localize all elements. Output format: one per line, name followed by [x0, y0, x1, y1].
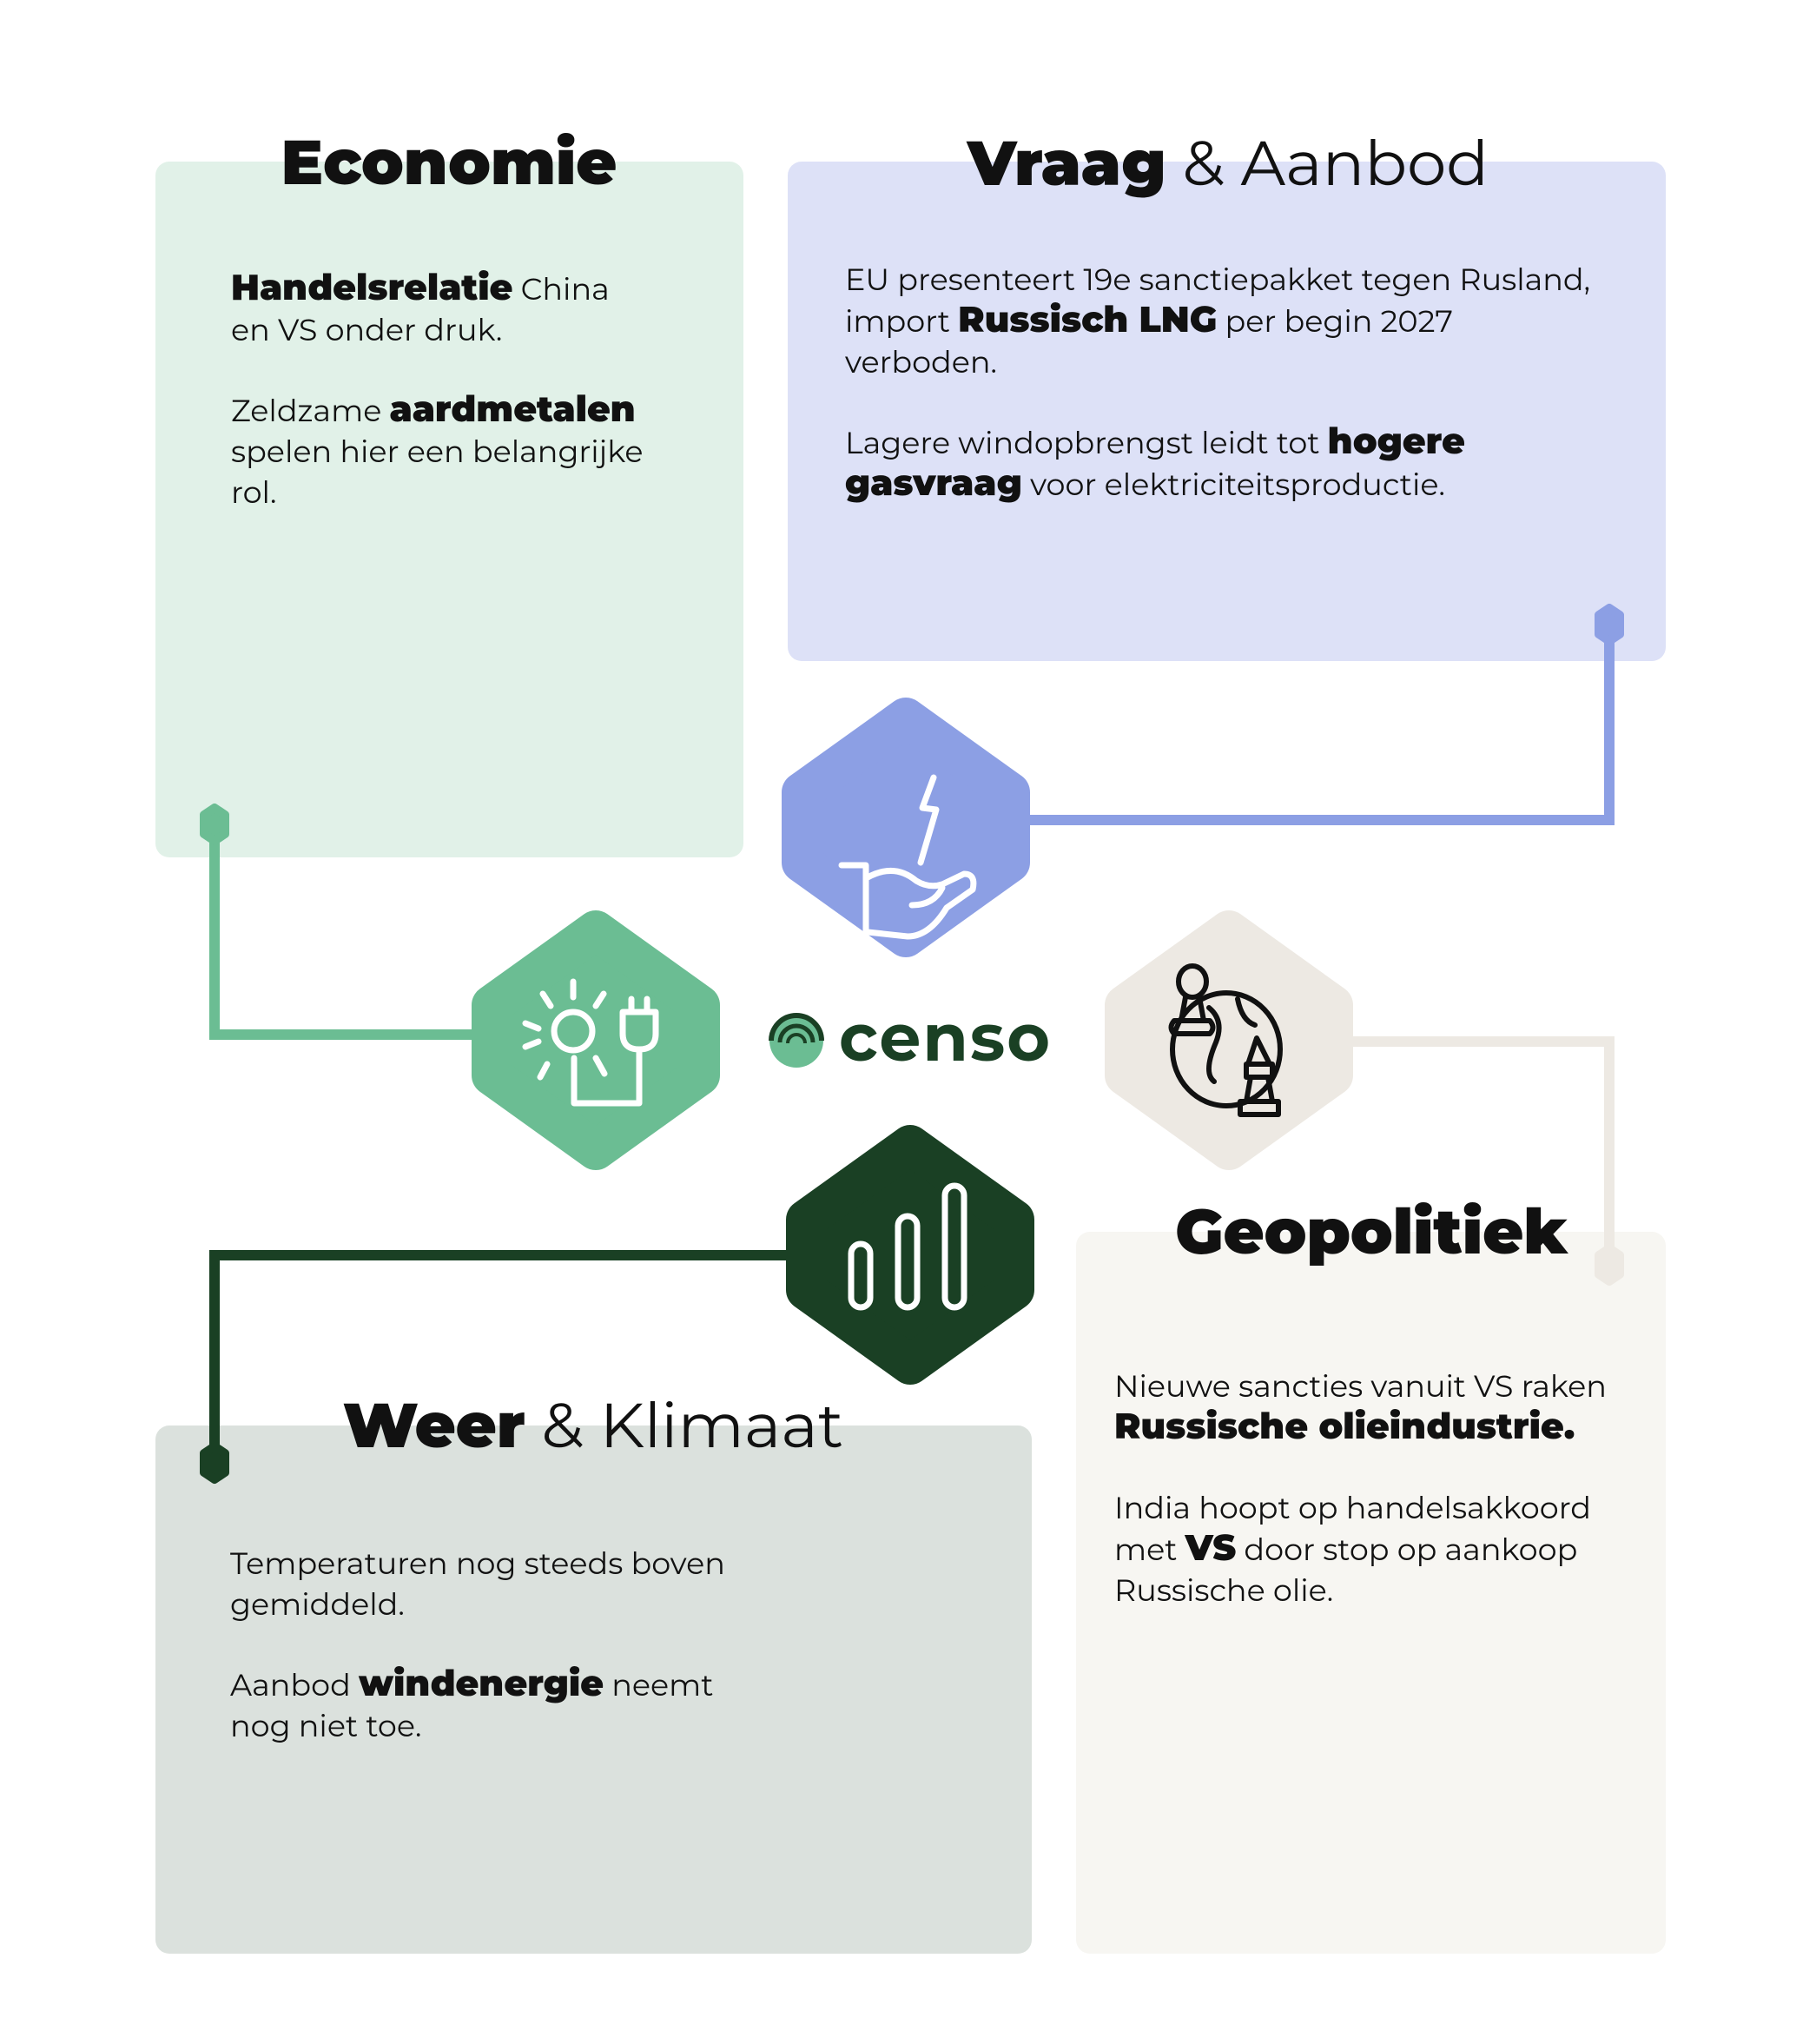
text: vraag: Lagere windopbrengst leidt tot hogere [845, 420, 1465, 463]
text: geopolitiek: India hoopt op handelsakkoord [1114, 1489, 1591, 1526]
text: economie: en VS onder druk. [231, 311, 502, 348]
text: weer: gemiddeld. [230, 1585, 405, 1623]
connector: geopolitiek [1303, 1042, 1620, 1281]
connector: vraag [999, 608, 1620, 820]
hexagon: dark green chart [806, 1145, 1014, 1365]
text: geopolitiek: Russische olieindustrie. [1114, 1405, 1575, 1448]
title: geopolitiek: Geopolitiek [1175, 1194, 1568, 1270]
text: vraag: verboden. [845, 343, 997, 380]
text: geopolitiek: Russische olie. [1114, 1571, 1333, 1609]
logo icon: censo [769, 1014, 823, 1068]
text: economie: Zeldzame aardmetalen [231, 387, 636, 431]
panel: economie [155, 162, 743, 857]
logo text: censo: censo [839, 997, 1052, 1078]
text: economie: rol. [231, 473, 276, 511]
connector: weer [204, 1255, 868, 1479]
text: weer: Temperaturen nog steeds boven [230, 1545, 725, 1582]
text: geopolitiek [1114, 1367, 1607, 1609]
hexagon: blue energy hand [802, 718, 1010, 948]
text: vraag: gasvraag voor elektriciteitsproductie. [845, 461, 1445, 505]
panel: weer & klimaat [155, 1426, 1032, 1954]
text: vraag [845, 261, 1590, 505]
title: vraag & aanbod: Vraag & Aanbod [967, 125, 1489, 202]
panel: geopolitiek [1076, 1232, 1666, 1954]
text: weer: Aanbod windenergie neemt [230, 1662, 714, 1705]
panel: vraag & aanbod [788, 162, 1666, 661]
text: geopolitiek: met VS door stop op aankoop [1114, 1526, 1577, 1570]
title: economie: Economie [281, 124, 617, 201]
text: economie [231, 266, 644, 511]
text: geopolitiek: Nieuwe sancties vanuit VS raken [1114, 1367, 1607, 1405]
hexagon: beige geopolitics [1125, 930, 1333, 1150]
text: weer [230, 1545, 725, 1744]
text: economie: spelen hier een belangrijke [231, 433, 644, 470]
connector: economie [204, 808, 538, 1035]
text: weer: nog niet toe. [230, 1707, 421, 1744]
title: weer & klimaat: Weer & Klimaat [343, 1387, 843, 1464]
text: economie: Handelsrelatie China [231, 266, 610, 309]
text: vraag: EU presenteert 19e sanctiepakket tegen Rusland, [845, 261, 1590, 298]
text: vraag: import Russisch LNG per begin 2027 [845, 298, 1453, 341]
hexagon: green sun plug [492, 930, 700, 1150]
